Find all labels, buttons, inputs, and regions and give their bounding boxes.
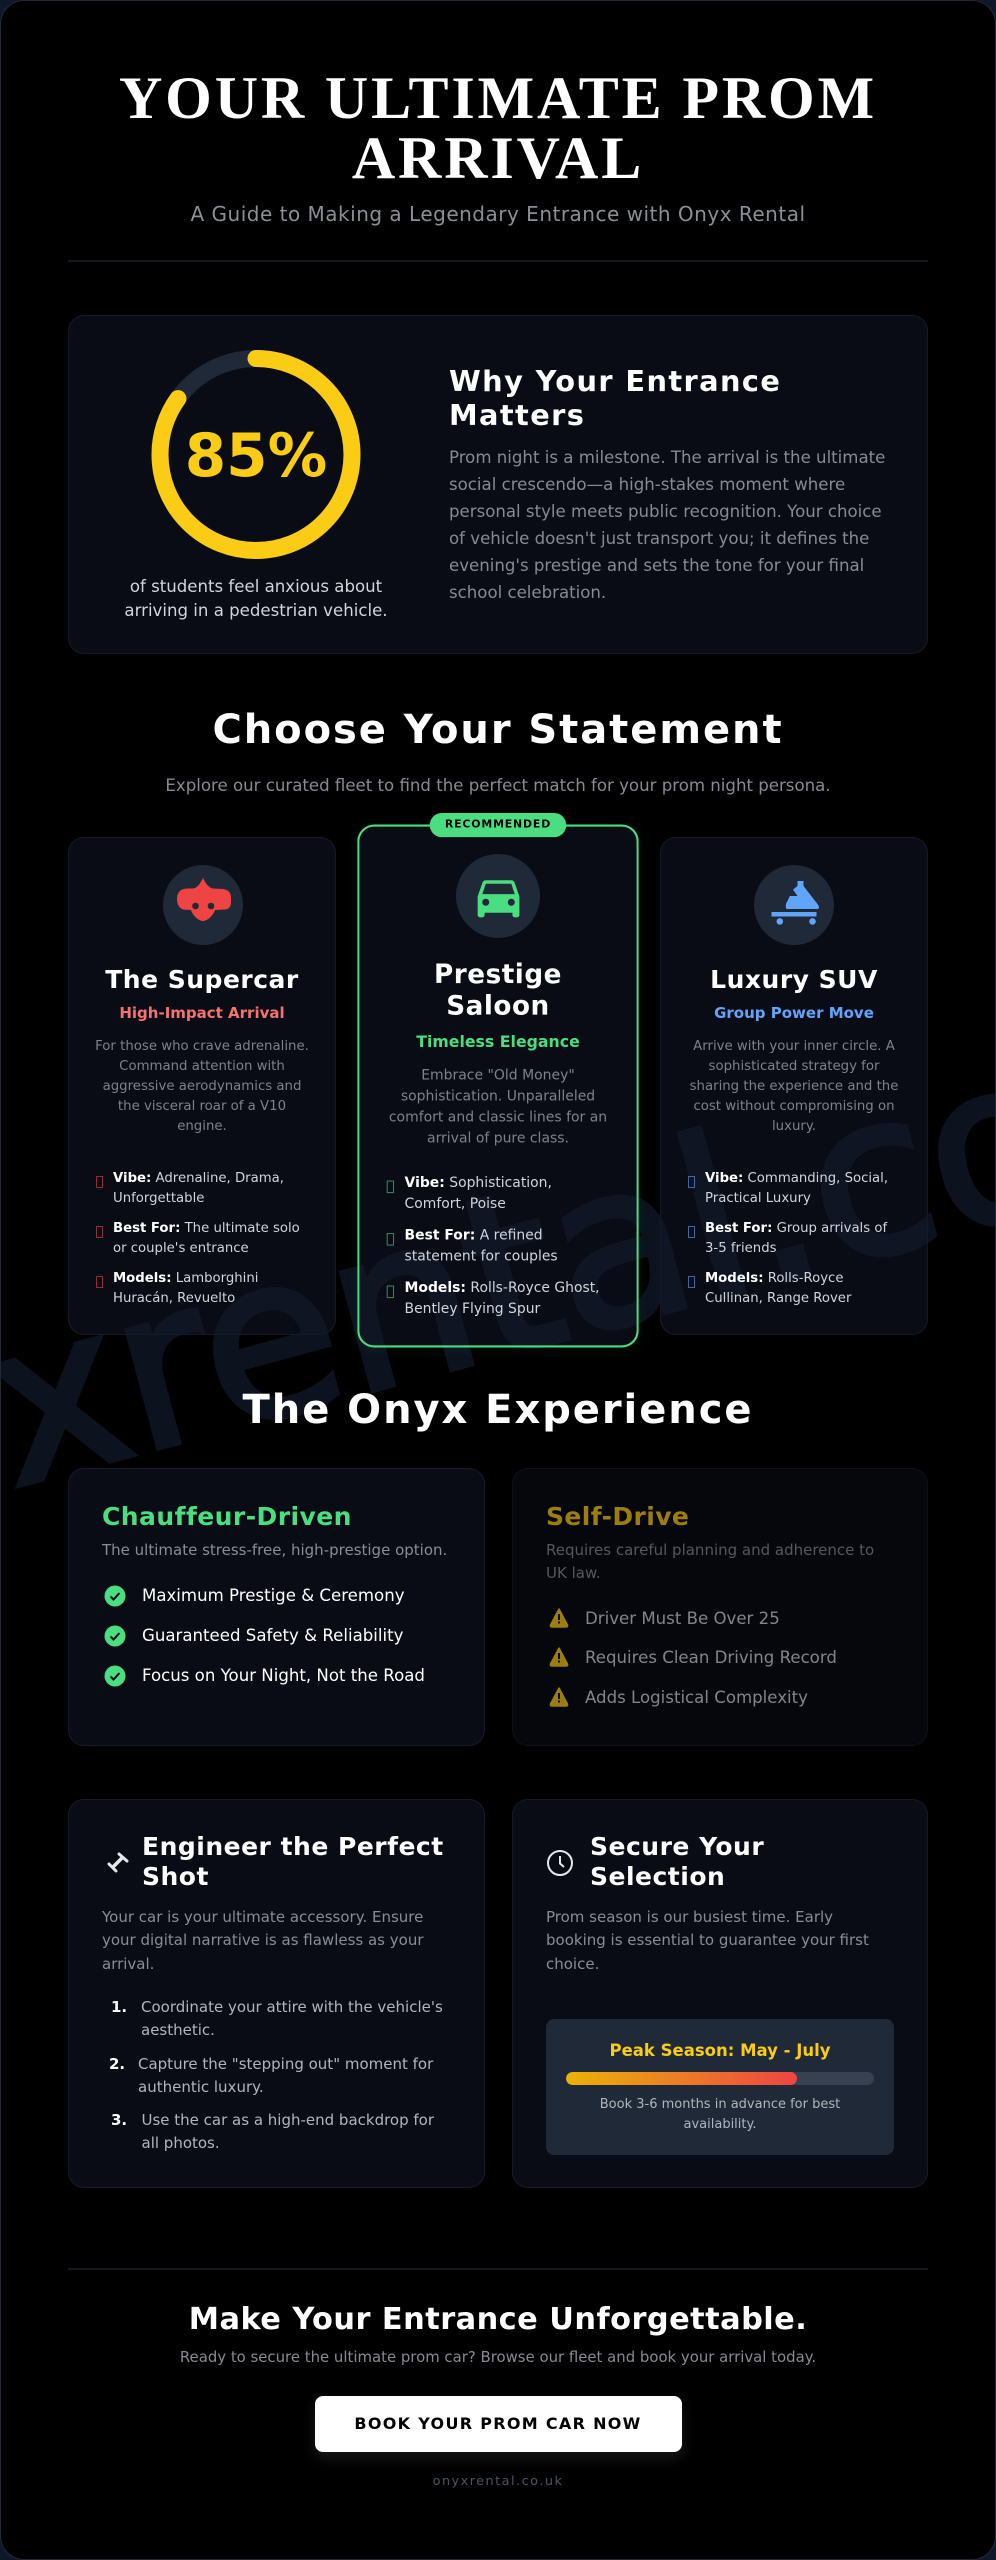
icon: warning: [550, 1647, 568, 1667]
step text: authentic luxury.: [138, 2078, 264, 2096]
step text: Coordinate your attire with the vehicle's: [141, 1998, 443, 2016]
step text: Use the car as a high-end backdrop for: [142, 2111, 434, 2129]
step number: 1.: [111, 1998, 127, 2016]
panel heading: [142, 1832, 444, 1891]
bar chart: peak season progress: [566, 2072, 874, 2085]
list item: Maximum Prestige & Ceremony: [142, 1586, 405, 1605]
footer link: onyxrental.co.uk: [433, 2474, 563, 2489]
card description: [95, 1039, 309, 1134]
recommended badge: RECOMMENDED: [445, 818, 551, 831]
list item: vibe: [404, 1175, 552, 1212]
icon: saloon car: [456, 854, 540, 938]
panel intro: The ultimate stress-free, high-prestige option.: [102, 1541, 447, 1559]
title: YOUR ULTIMATE PROM: [119, 65, 877, 131]
card description: Command attention with: [119, 1059, 285, 1074]
panel heading: Self-Drive: [546, 1502, 689, 1531]
list item: vibe: Comfort, Poise: [405, 1196, 506, 1212]
icon: supercar: [162, 865, 242, 945]
icon: luxury suv: [754, 865, 834, 945]
list item: Driver Must Be Over 25: [585, 1609, 780, 1628]
panel heading: [590, 1832, 764, 1891]
list marker: [688, 1176, 695, 1188]
panel intro: arrival.: [102, 1955, 154, 1973]
heading: the onyx experience: The Onyx Experience: [243, 1387, 753, 1433]
list item: Guaranteed Safety & Reliability: [142, 1626, 403, 1645]
panel heading: Chauffeur-Driven: [102, 1502, 352, 1531]
card description: comfort and classic lines for an: [389, 1110, 607, 1126]
step text: all photos.: [142, 2134, 220, 2152]
stat caption: of students feel anxious about: [130, 577, 382, 596]
panel intro: your digital narrative is as flawless as your: [102, 1931, 424, 1949]
list item: best for: [705, 1221, 888, 1256]
chart: 85% progress ring: [152, 350, 360, 559]
step text: [142, 2111, 434, 2152]
card description: sophistication. Unparalleled: [401, 1089, 595, 1105]
call to action text: Ready to secure the ultimate prom car? Browse our fleet and book your arrival today.: [180, 2348, 816, 2366]
panel intro: [546, 1541, 874, 1582]
panel intro: Prom season is our busiest time. Early: [546, 1908, 833, 1926]
icon: check: [104, 1626, 126, 1646]
step text: [141, 1998, 443, 2039]
list item: models: Models: Lamborghini: [113, 1271, 258, 1286]
title: ARRIVAL: [352, 125, 644, 191]
icon: check: [104, 1666, 126, 1686]
panel heading: Secure Your: [590, 1832, 764, 1861]
list marker: [96, 1226, 103, 1238]
panel: secure your selection: [512, 1799, 928, 2188]
section intro: Explore our curated fleet to find the perfect match for your prom night persona.: [165, 776, 831, 795]
card tagline: Timeless Elegance: [416, 1032, 580, 1051]
list marker: [96, 1176, 103, 1188]
list marker: [688, 1226, 695, 1238]
title: [119, 65, 877, 191]
card title: Prestige: [434, 959, 562, 989]
callout heading: Peak Season: May - July: [609, 2041, 831, 2060]
card tagline: Group Power Move: [714, 1004, 874, 1022]
body text: Prom night is a milestone. The arrival is the ultimate: [449, 448, 885, 467]
list item: best for: 3-5 friends: [705, 1241, 777, 1256]
heading: call to action: Make Your Entrance Unforgettable.: [189, 2302, 807, 2337]
list item: best for: Best For: Group arrivals of: [705, 1221, 887, 1236]
card title: Luxury SUV: [710, 965, 878, 994]
list marker: [96, 1276, 103, 1288]
list item: best for: Best For: A refined: [405, 1228, 543, 1244]
list marker: [387, 1286, 394, 1298]
list item: Focus on Your Night, Not the Road: [142, 1666, 425, 1685]
card description: Arrive with your inner circle. A: [693, 1039, 895, 1054]
card tagline: High-Impact Arrival: [119, 1004, 285, 1022]
list item: Requires Clean Driving Record: [585, 1648, 837, 1667]
list marker: [688, 1276, 695, 1288]
card description: [690, 1039, 898, 1134]
list item: models: Bentley Flying Spur: [405, 1301, 540, 1317]
panel intro: Your car is your ultimate accessory. Ensure: [102, 1908, 423, 1926]
body text: school celebration.: [449, 583, 606, 602]
body text: of vehicle doesn't just transport you; it defines the: [449, 529, 869, 548]
list item: best for: or couple's entrance: [113, 1241, 249, 1256]
list item: models: [405, 1280, 600, 1317]
card description: aggressive aerodynamics and: [103, 1079, 301, 1094]
icon: warning: [550, 1687, 568, 1707]
stat caption: [124, 577, 388, 620]
panel: luxury suv: [660, 837, 928, 1335]
subtitle: A Guide to Making a Legendary Entrance with Onyx Rental: [190, 202, 806, 226]
panel heading: Engineer the Perfect: [142, 1832, 444, 1861]
bar fill: [566, 2072, 797, 2085]
step text: [138, 2055, 434, 2096]
callout note: availability.: [684, 2117, 756, 2132]
list item: best for: Best For: The ultimate solo: [113, 1221, 300, 1236]
card description: cost without compromising on: [693, 1099, 895, 1114]
list item: vibe: Vibe: Adrenaline, Drama,: [113, 1171, 284, 1186]
icon: check: [104, 1586, 126, 1606]
button: book your prom car: [314, 2396, 682, 2452]
panel: why your entrance matters: [68, 315, 928, 654]
panel intro: UK law.: [546, 1564, 601, 1582]
panel: self-drive: [512, 1468, 928, 1746]
list item: best for: [405, 1228, 558, 1264]
card description: Embrace "Old Money": [421, 1068, 575, 1084]
body text: [449, 448, 885, 602]
card title: Saloon: [446, 991, 550, 1021]
body text: evening's prestige and sets the tone for your final: [449, 556, 864, 575]
panel intro: Requires careful planning and adherence to: [546, 1541, 874, 1559]
card description: [389, 1068, 607, 1147]
panel intro: [102, 1908, 424, 1973]
list item: vibe: Practical Luxury: [705, 1191, 811, 1206]
panel: chauffeur-driven: [68, 1468, 485, 1746]
heading: Matters: [449, 398, 585, 432]
list marker: [387, 1233, 394, 1246]
step number: 2.: [109, 2055, 125, 2073]
check list: [104, 1586, 425, 1686]
list item: vibe: Unforgettable: [113, 1191, 204, 1206]
panel: the supercar: [68, 837, 336, 1335]
heading: choose your statement: Choose Your Statement: [212, 707, 784, 753]
list item: models: [113, 1271, 258, 1306]
callout note: [600, 2097, 840, 2132]
callout note: Book 3-6 months in advance for best: [600, 2097, 840, 2112]
body text: personal style meets public recognition. Your choice: [449, 502, 882, 521]
card description: For those who crave adrenaline.: [95, 1039, 309, 1054]
list item: best for: statement for couples: [405, 1249, 558, 1264]
heading: [449, 364, 781, 432]
heading: Why Your Entrance: [449, 364, 781, 398]
list item: models: [705, 1271, 852, 1306]
button: book your prom car: BOOK YOUR PROM CAR NOW: [354, 2414, 642, 2433]
list item: models: Models: Rolls-Royce: [705, 1271, 843, 1286]
list item: vibe: [113, 1171, 284, 1206]
card description: engine.: [177, 1119, 227, 1134]
step number: 3.: [111, 2111, 127, 2129]
card title: [434, 959, 562, 1021]
card title: The Supercar: [105, 965, 299, 994]
list marker: [387, 1180, 394, 1193]
card description: arrival of pure class.: [427, 1131, 569, 1147]
callout: peak season: [546, 2019, 894, 2155]
panel intro: choice.: [546, 1955, 599, 1973]
step text: aesthetic.: [141, 2021, 215, 2039]
chart: 85% progress ring: 85%: [185, 422, 327, 491]
card description: luxury.: [772, 1119, 816, 1134]
list item: models: Models: Rolls-Royce Ghost,: [405, 1280, 600, 1296]
step text: Capture the "stepping out" moment for: [138, 2055, 433, 2073]
card description: sharing the experience and the: [690, 1079, 898, 1094]
list item: best for: [113, 1221, 300, 1256]
card description: sophisticated strategy for: [709, 1059, 879, 1074]
stat caption: arriving in a pedestrian vehicle.: [124, 600, 388, 620]
body text: social crescendo—a high-stakes moment where: [449, 475, 845, 494]
icon: wrench: [107, 1852, 129, 1873]
list item: Adds Logistical Complexity: [585, 1688, 808, 1707]
list item: vibe: Vibe: Commanding, Social,: [705, 1171, 888, 1186]
panel: prestige saloon: [357, 825, 639, 1347]
panel intro: [546, 1908, 869, 1973]
list item: models: Cullinan, Range Rover: [705, 1291, 851, 1306]
panel: engineer the perfect shot: [68, 1799, 485, 2188]
list item: vibe: [705, 1171, 888, 1206]
list item: models: Huracán, Revuelto: [113, 1291, 235, 1306]
panel intro: booking is essential to guarantee your first: [546, 1931, 869, 1949]
panel heading: Selection: [590, 1862, 725, 1891]
list item: vibe: Vibe: Sophistication,: [405, 1175, 552, 1191]
recommended badge: [430, 813, 566, 837]
warning list: [550, 1608, 837, 1707]
panel heading: Shot: [142, 1862, 209, 1891]
icon: clock: [547, 1850, 573, 1876]
icon: warning: [550, 1608, 568, 1628]
card description: the visceral roar of a V10: [118, 1099, 286, 1114]
